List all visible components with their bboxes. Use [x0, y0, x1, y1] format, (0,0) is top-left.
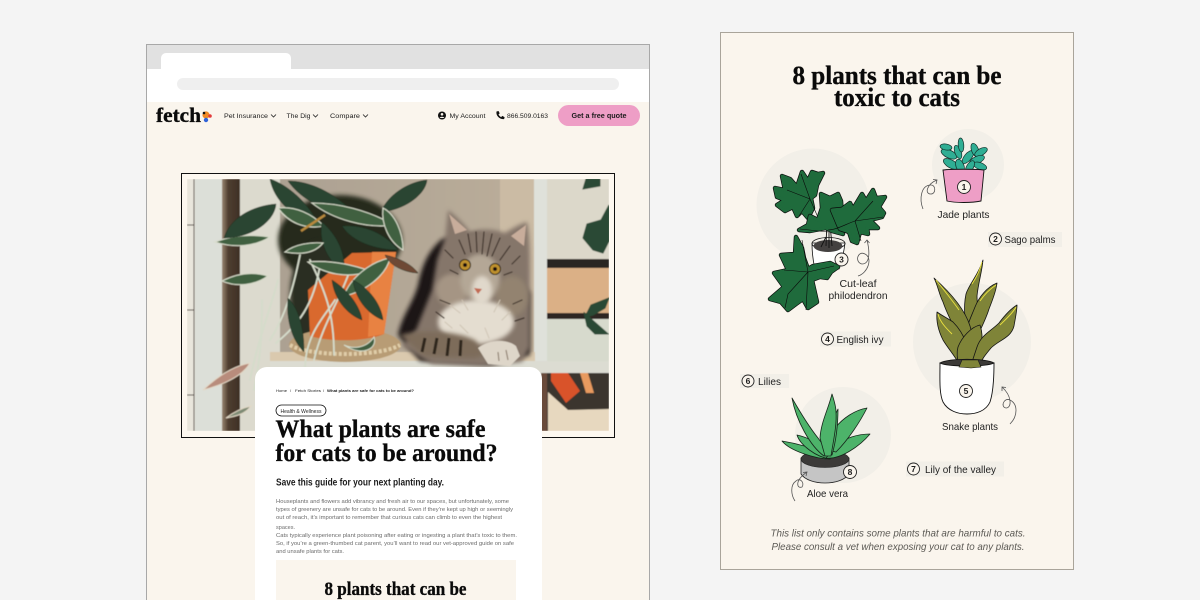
number badge 3: 3 [839, 254, 844, 264]
label: philodendron [828, 290, 888, 302]
footnote [770, 528, 1026, 553]
label: lilies: Lilies [758, 376, 781, 388]
plant: snake plants [913, 260, 1031, 433]
article body text [276, 499, 517, 555]
label: Snake plants [942, 421, 998, 433]
plant: aloe vera [782, 387, 891, 501]
number badge 1: 1 [962, 182, 967, 192]
label: Jade plants [938, 209, 990, 221]
article title: for cats to be around? [276, 440, 498, 467]
tag pill: Health & Wellness [280, 409, 322, 415]
article body text: types of greenery are unsafe for cats to be around. Even if they’re kept up high or seemingly [276, 507, 513, 513]
navigation bar [156, 105, 640, 126]
logo: fetch [156, 103, 201, 127]
number badge 3 [835, 253, 848, 266]
label: lilies [740, 374, 789, 388]
orange pot and basket [289, 328, 401, 362]
breadcrumbs [276, 390, 414, 393]
label: english ivy: English ivy [836, 334, 884, 346]
hero photo of cat and plant [182, 174, 614, 438]
breadcrumbs: / [290, 388, 292, 393]
cat [398, 233, 530, 365]
label: sago palms [988, 232, 1062, 247]
number badge 5 [960, 384, 972, 398]
browser chrome [147, 45, 649, 102]
arrow [921, 180, 937, 209]
label: english ivy [820, 332, 891, 346]
button [558, 105, 640, 126]
breadcrumbs: / [323, 388, 325, 393]
icon: account [438, 112, 446, 120]
dark foliage mass [278, 195, 402, 285]
article subtitle: Save this guide for your next planting day. [276, 478, 444, 488]
breadcrumbs: Home [276, 388, 287, 393]
trailing leaves [280, 254, 350, 361]
navigation bar: Compare [330, 113, 360, 120]
number badge 8: 8 [848, 467, 853, 477]
label: lily of the valley [906, 462, 1004, 476]
leaves [940, 138, 989, 175]
button: Get a free quote [572, 113, 627, 120]
arrow [858, 240, 870, 276]
pot [801, 450, 849, 483]
title: toxic to cats [834, 83, 960, 112]
article body text: spaces. [276, 525, 295, 531]
plant: jade plants [921, 129, 1004, 221]
breadcrumbs: Fetch Stories [295, 388, 321, 393]
number badge 5: 5 [964, 386, 969, 396]
label: sago palms: Sago palms [1004, 234, 1056, 246]
article title: What plants are safe [276, 416, 486, 443]
navigation bar: 866.509.0163 [507, 113, 548, 120]
footnote: This list only contains some plants that are harmful to cats. [770, 528, 1026, 540]
label: Cut-leaf [840, 278, 877, 290]
label: lilies: 6 [746, 376, 751, 386]
label [828, 278, 888, 302]
plant: cut-leaf philodendron [756, 148, 888, 310]
article body text: Houseplants and flowers add vibrancy and fresh air to our spaces, but unfortunately, some [276, 499, 509, 505]
article body text: and unsafe plants for cats. [276, 549, 344, 555]
icon: phone [496, 111, 505, 119]
panel: 8 plants infographic [720, 32, 1074, 570]
label: lily of the valley: Lily of the valley [925, 464, 997, 476]
title [792, 61, 1002, 112]
embedded infographic preview: 8 plants that can be [324, 580, 466, 600]
logo [156, 107, 212, 122]
leaves [775, 172, 823, 218]
navigation bar: Pet Insurance [224, 113, 268, 120]
pot [940, 359, 994, 414]
label: lily of the valley: 7 [911, 464, 916, 474]
breadcrumbs: What plants are safe for cats to be around? [327, 388, 415, 393]
pot [943, 169, 984, 202]
navigation bar: The Dig [286, 113, 311, 120]
arrow [792, 472, 807, 501]
embedded infographic preview [276, 560, 516, 600]
article title [276, 419, 496, 462]
article card [255, 367, 542, 600]
label: sago palms: 2 [993, 234, 998, 244]
tag pill [276, 405, 326, 416]
label: english ivy: 4 [825, 334, 830, 344]
footnote: Please consult a vet when exposing your cat to any plants. [772, 541, 1024, 553]
label: Aloe vera [807, 488, 848, 500]
article body text: out of reach, it’s important to remember that curious cats can climb to even the highest [276, 515, 502, 521]
article body text: So, if you’re a green-thumbed cat parent, you’ll want to read our vet-approved guide on safe [276, 541, 514, 547]
leaves [934, 260, 1017, 368]
panel: website browser mockup [146, 44, 650, 600]
leaves [782, 394, 870, 459]
title: 8 plants that can be [792, 61, 1002, 90]
article body text: Cats typically experience plant poisoning after eating or ingesting a plant that’s toxic to them. [276, 533, 517, 539]
arrow [1002, 387, 1016, 424]
pot [812, 238, 845, 269]
navigation bar: My Account [450, 113, 486, 120]
